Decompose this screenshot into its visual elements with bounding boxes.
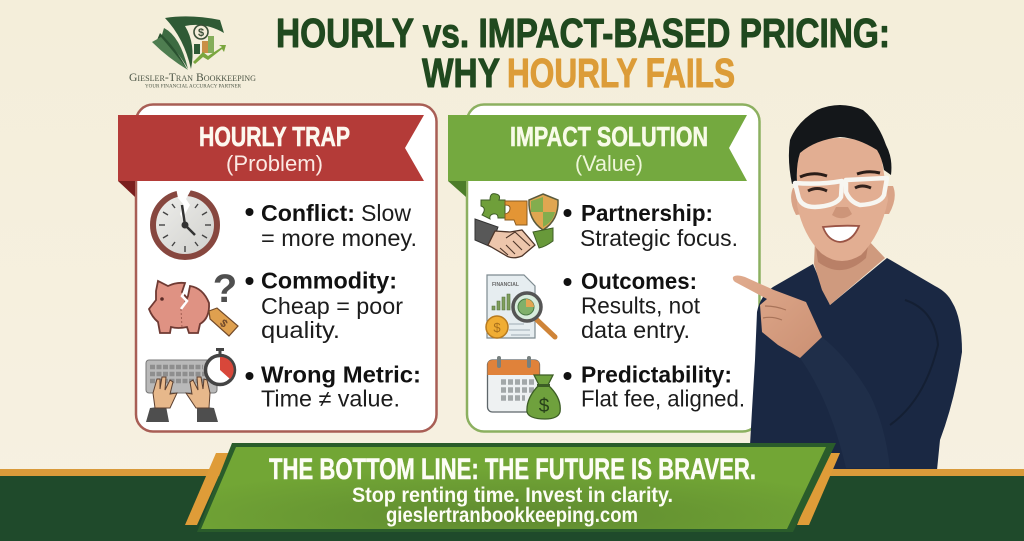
banner: impact solution bbox=[448, 115, 747, 197]
bullet: outcomes: data entry. bbox=[581, 317, 690, 343]
bullet: predictability: Predictability: bbox=[581, 362, 732, 388]
bullet: outcomes bbox=[564, 268, 701, 343]
title: HOURLY FAILS bbox=[507, 50, 735, 96]
icon: calendar and money bag bbox=[488, 356, 560, 419]
banner: impact solution: (Value) bbox=[575, 151, 643, 176]
icon: broken piggy bank: ? bbox=[213, 267, 237, 311]
icon: puzzle, shield and handshake bbox=[475, 194, 558, 258]
logo: YOUR FINANCIAL ACCURACY PARTNER bbox=[145, 84, 241, 90]
bottom line heading: THE BOTTOM LINE: THE FUTURE IS BRAVER. bbox=[269, 453, 756, 486]
bullet: conflict: Conflict: bbox=[261, 200, 355, 226]
bullet: predictability: Flat fee, aligned. bbox=[581, 386, 745, 412]
bullet: partnership: Partnership: bbox=[581, 200, 713, 226]
logo: $ bbox=[198, 27, 204, 39]
photo: presenter pointing at panel bbox=[733, 105, 962, 470]
banner: impact solution: IMPACT SOLUTION bbox=[510, 121, 708, 152]
bullet: commodity: quality. bbox=[261, 317, 340, 343]
bullet: wrong metric bbox=[246, 362, 421, 412]
bullet: conflict: = more money. bbox=[261, 225, 417, 251]
title bbox=[276, 10, 890, 96]
icon: broken piggy bank bbox=[149, 267, 238, 336]
call to action: Stop renting time. Invest in clarity. bbox=[352, 484, 673, 507]
panel: impact solution bbox=[448, 104, 760, 432]
bullet: wrong metric: Wrong Metric: bbox=[261, 362, 421, 388]
bullet: outcomes: Outcomes: bbox=[581, 268, 697, 294]
bullet: commodity: Cheap = poor bbox=[261, 293, 403, 319]
bullet: partnership: Strategic focus. bbox=[580, 225, 738, 251]
footer band bbox=[0, 469, 1024, 541]
bullet: commodity bbox=[246, 268, 403, 343]
icon: broken piggy bank: $ bbox=[217, 317, 230, 330]
icon: financial report and magnifier: FINANCIAL bbox=[492, 282, 519, 288]
bullet: conflict: Slow bbox=[361, 200, 411, 226]
title: WHY bbox=[422, 50, 500, 96]
bullet: outcomes: Results, not bbox=[581, 292, 701, 318]
website: gieslertranbookkeeping.com bbox=[386, 504, 638, 527]
icon: calendar and money bag: $ bbox=[539, 396, 550, 417]
icon: financial report and magnifier bbox=[486, 275, 555, 338]
icon: financial report and magnifier: $ bbox=[493, 320, 501, 335]
logo bbox=[129, 16, 256, 89]
bullet: commodity: Commodity: bbox=[261, 268, 397, 294]
bullet: conflict bbox=[246, 200, 417, 251]
title: HOURLY vs. IMPACT-BASED PRICING: bbox=[276, 10, 890, 56]
panel: hourly trap bbox=[118, 104, 436, 432]
banner: hourly trap: (Problem) bbox=[226, 151, 323, 176]
icon: keyboard and stopwatch bbox=[146, 348, 234, 422]
banner: hourly trap: HOURLY TRAP bbox=[199, 121, 350, 152]
banner: bottom line bbox=[185, 443, 840, 532]
banner: hourly trap bbox=[118, 115, 424, 197]
icon: broken clock bbox=[153, 188, 217, 257]
bullet: wrong metric: Time ≠ value. bbox=[261, 386, 400, 412]
bullet: predictability bbox=[564, 362, 745, 412]
bullet: partnership bbox=[564, 200, 738, 251]
logo: Giesler-Tran Bookkeeping bbox=[129, 72, 256, 84]
